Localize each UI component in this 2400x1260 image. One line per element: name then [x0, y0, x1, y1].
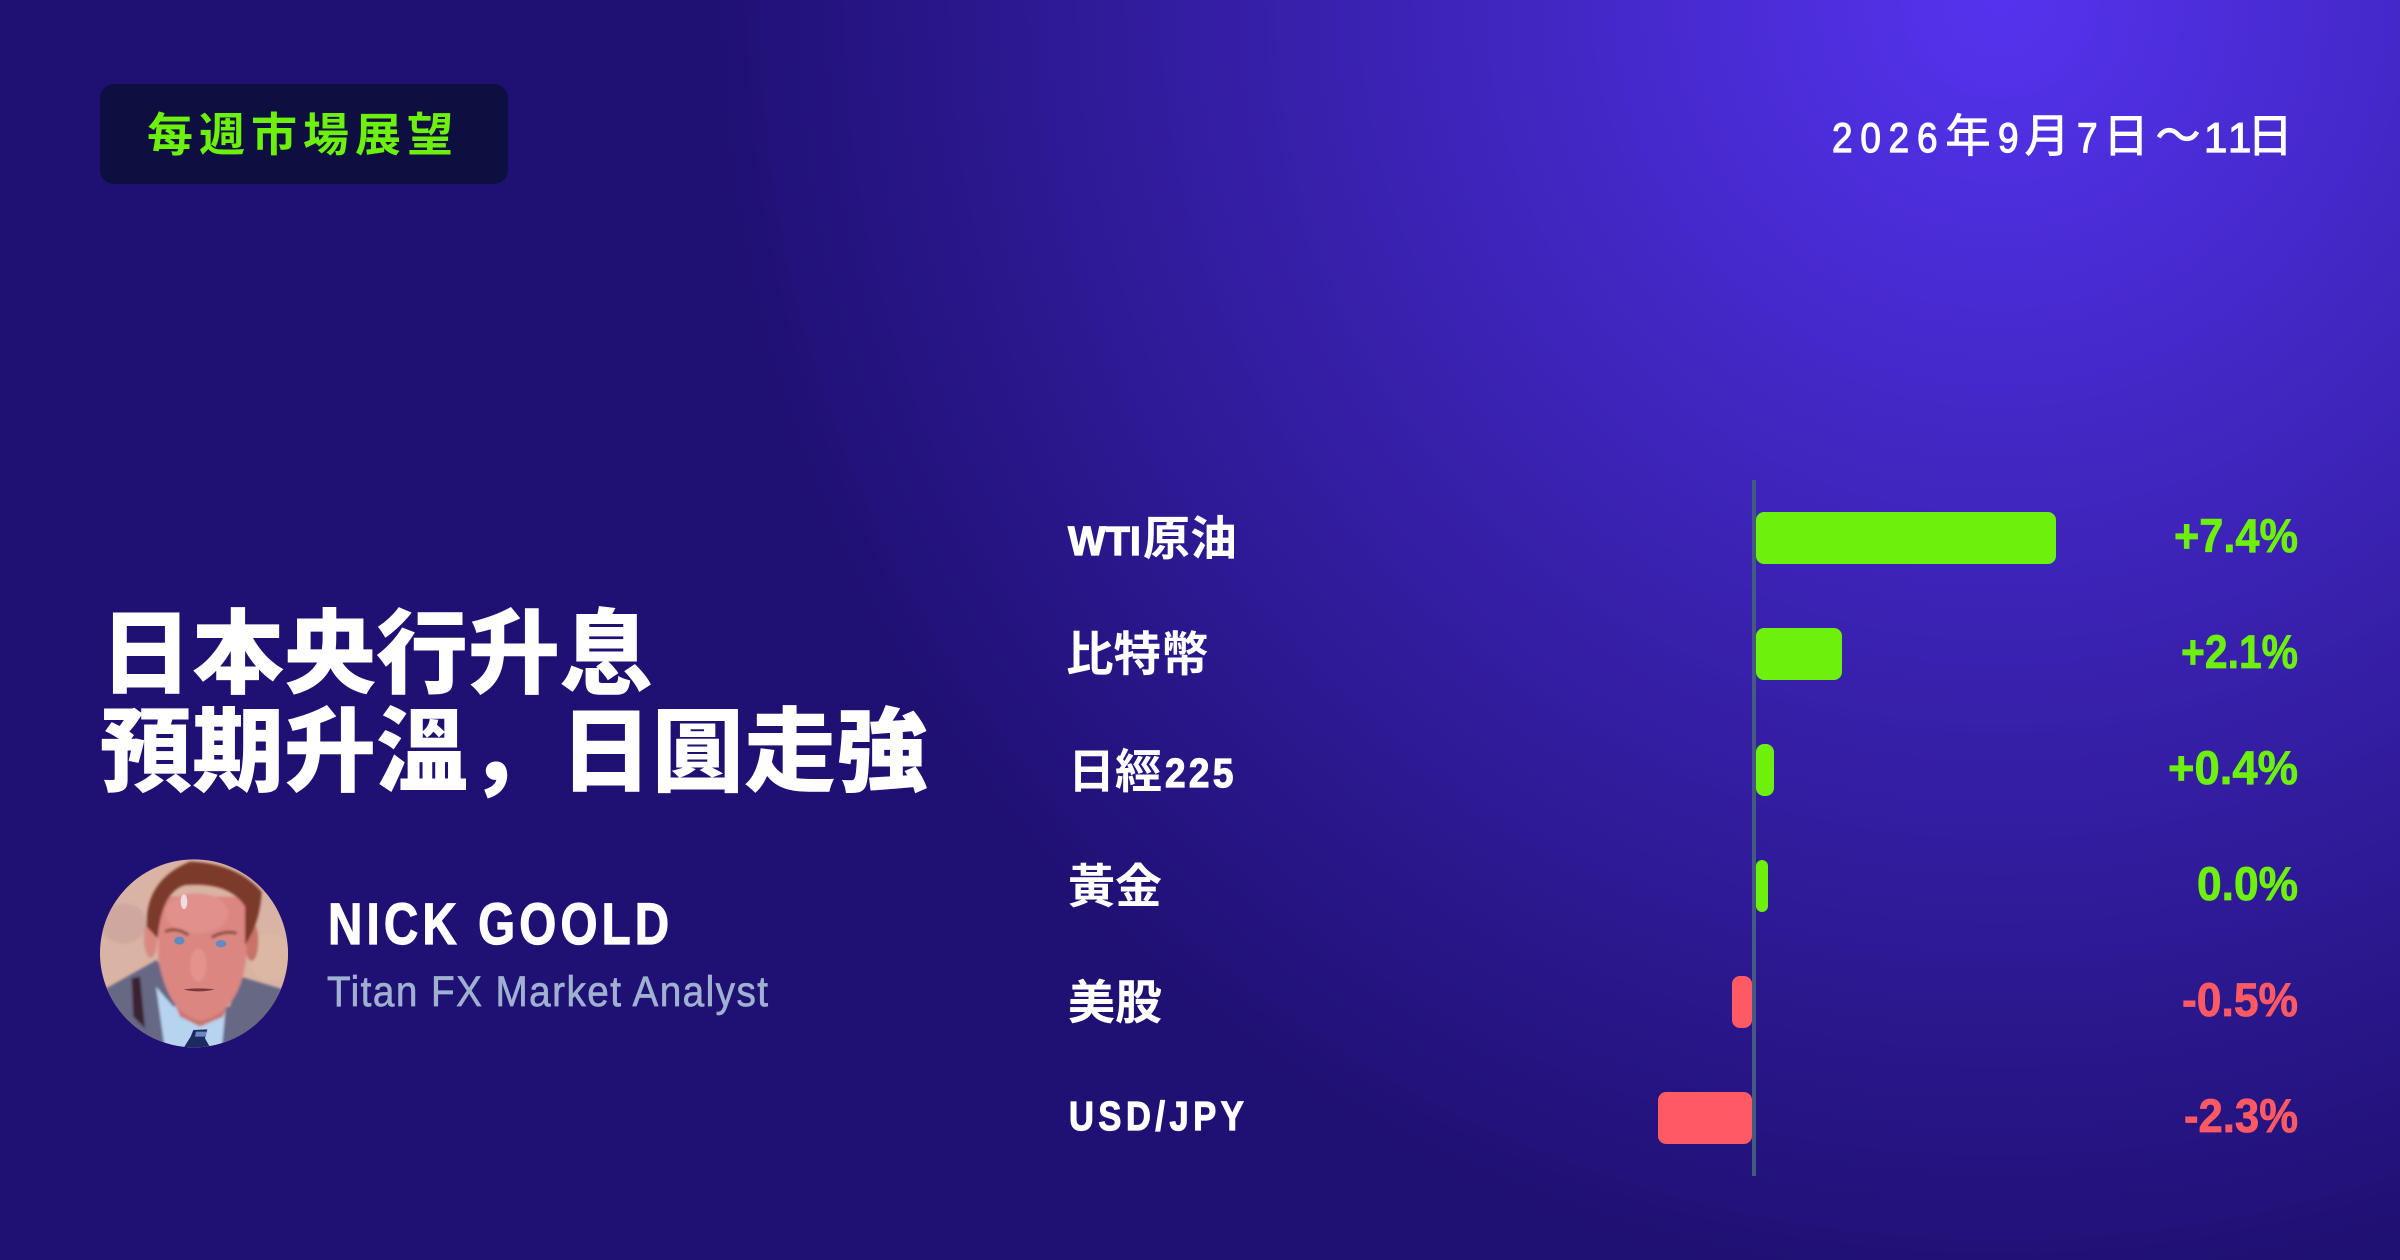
row: US stocks: [1068, 964, 2298, 1033]
row: Gold: [1068, 848, 2298, 917]
analyst name: NICK GOOLD: [328, 893, 669, 957]
row: Bitcoin: +2.1%: [2181, 625, 2298, 678]
badge: weekly market outlook: [100, 84, 508, 184]
row: Bitcoin: [1066, 616, 2298, 685]
date range: 日: [2103, 100, 2149, 166]
title: [100, 580, 928, 811]
date range: 2026: [1832, 115, 1938, 162]
date range: 年: [1945, 100, 1991, 166]
date range: 9: [1998, 115, 2019, 162]
analyst role: Titan FX Market Analyst: [327, 967, 769, 1015]
icon: analyst portrait: [100, 859, 288, 1048]
row: Bitcoin: 比特幣: [1066, 616, 1208, 685]
date range: [1832, 100, 2293, 166]
date range: 日: [2247, 100, 2293, 166]
row: Nikkei 225: [1068, 733, 2298, 802]
bar chart: weekly performance: [1066, 480, 2298, 1176]
date range: 月: [2024, 100, 2070, 166]
row: Nikkei 225: 日經: [1068, 733, 1162, 802]
date range: 〜: [2155, 100, 2201, 166]
row: WTI crude: WTI: [1068, 518, 1141, 564]
title: 日本央行升息: [100, 580, 652, 713]
date range: 1: [2204, 114, 2227, 161]
row: WTI crude: 原油: [1143, 500, 1237, 569]
row: USD/JPY: [1069, 1089, 2298, 1144]
row: US stocks: 美股: [1068, 964, 1162, 1033]
row: USD/JPY: -2.3%: [2184, 1089, 2298, 1142]
title: 預期升溫，日圓走強: [100, 678, 928, 811]
date range: 1: [2228, 114, 2251, 161]
badge: weekly market outlook: 每週市場展望: [147, 99, 459, 165]
row: US stocks: -0.5%: [2182, 973, 2298, 1026]
row: Nikkei 225: +0.4%: [2168, 741, 2298, 794]
row: WTI crude: [1068, 500, 2298, 569]
row: WTI crude: +7.4%: [2174, 509, 2298, 562]
row: USD/JPY: USD/JPY: [1069, 1094, 1244, 1140]
row: Gold: 0.0%: [2197, 857, 2298, 910]
row: Gold: 黃金: [1068, 848, 1162, 917]
row: Nikkei 225: 225: [1165, 751, 1233, 796]
date range: 7: [2077, 115, 2098, 162]
chart axis: [1752, 480, 1756, 1176]
